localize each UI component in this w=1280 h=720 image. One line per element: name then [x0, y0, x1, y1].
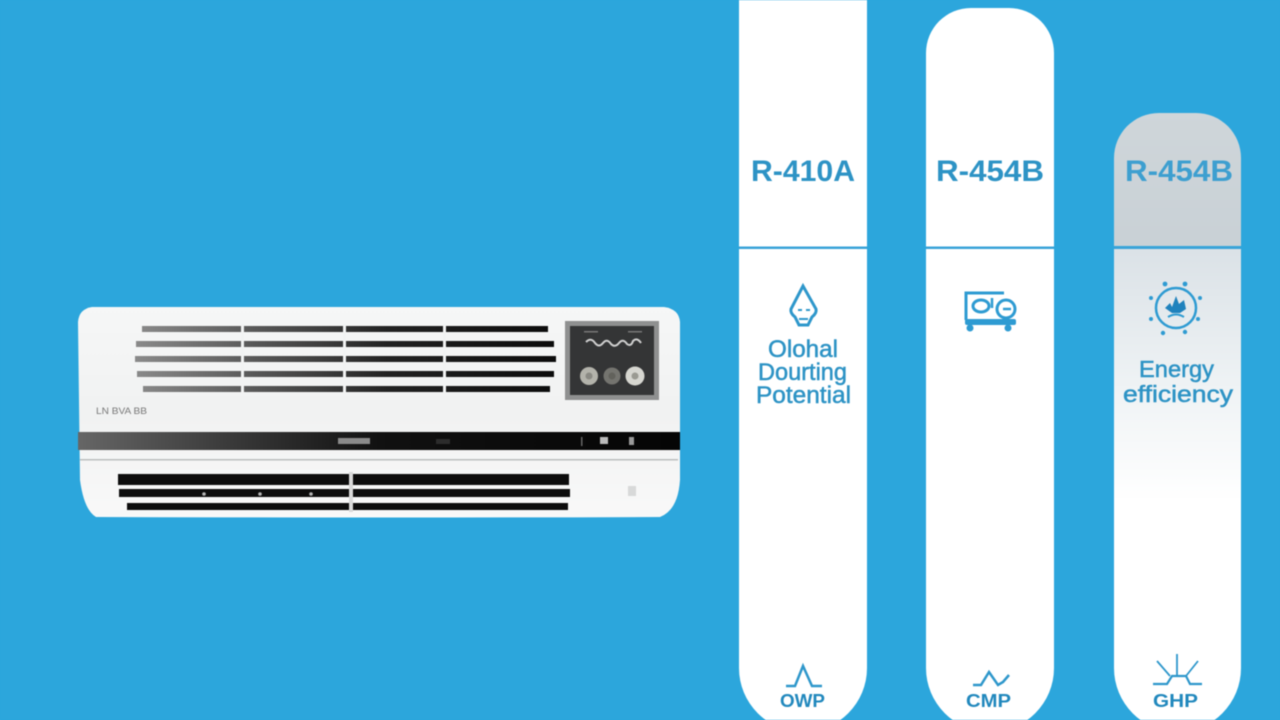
label: Energy efficiency: [1123, 356, 1234, 407]
label: Global warming potential: Olohal: [768, 336, 838, 363]
model label: LN BVA BB: [96, 406, 147, 416]
column 1 shape: [739, 0, 867, 720]
lid seam: [80, 459, 678, 460]
lower louvres: [118, 474, 570, 510]
label: OWP: OWP: [780, 691, 825, 711]
icon: zigzag: [973, 672, 1009, 685]
heading R-454B: R-454B: [936, 155, 1044, 188]
column 3 top shape: [1114, 113, 1241, 246]
label: CMP: CMP: [966, 691, 1011, 711]
label: Energy efficiency: efficiency: [1123, 381, 1234, 407]
column: R-410A: [739, 0, 867, 720]
icon: sun gear: [1149, 282, 1202, 335]
label: Global warming potential: Dourting: [758, 359, 847, 386]
icon: water drop: [791, 286, 816, 325]
label: Global warming potential: Potential: [756, 382, 851, 409]
icon: delivery truck: [965, 293, 1016, 332]
label: Global warming potential: [756, 336, 851, 409]
icon: peak: [786, 666, 822, 686]
unit body: [78, 307, 680, 518]
control panel: [565, 321, 659, 400]
column 2 shape: [926, 8, 1054, 720]
heading R-410A: R-410A: [751, 155, 855, 188]
air conditioner unit: [78, 307, 680, 518]
upper louvres: [135, 326, 556, 392]
label: GHP: GHP: [1153, 691, 1198, 711]
dark display band: [78, 432, 680, 450]
column 3 lower shape: [1114, 249, 1241, 720]
label: Energy efficiency: Energy: [1139, 356, 1215, 382]
heading R-454B: R-454B: [1125, 155, 1233, 188]
icon: radiating peak: [1153, 654, 1202, 684]
column: R-454B: [926, 8, 1054, 720]
column: R-454B energy efficiency: [1114, 113, 1241, 720]
